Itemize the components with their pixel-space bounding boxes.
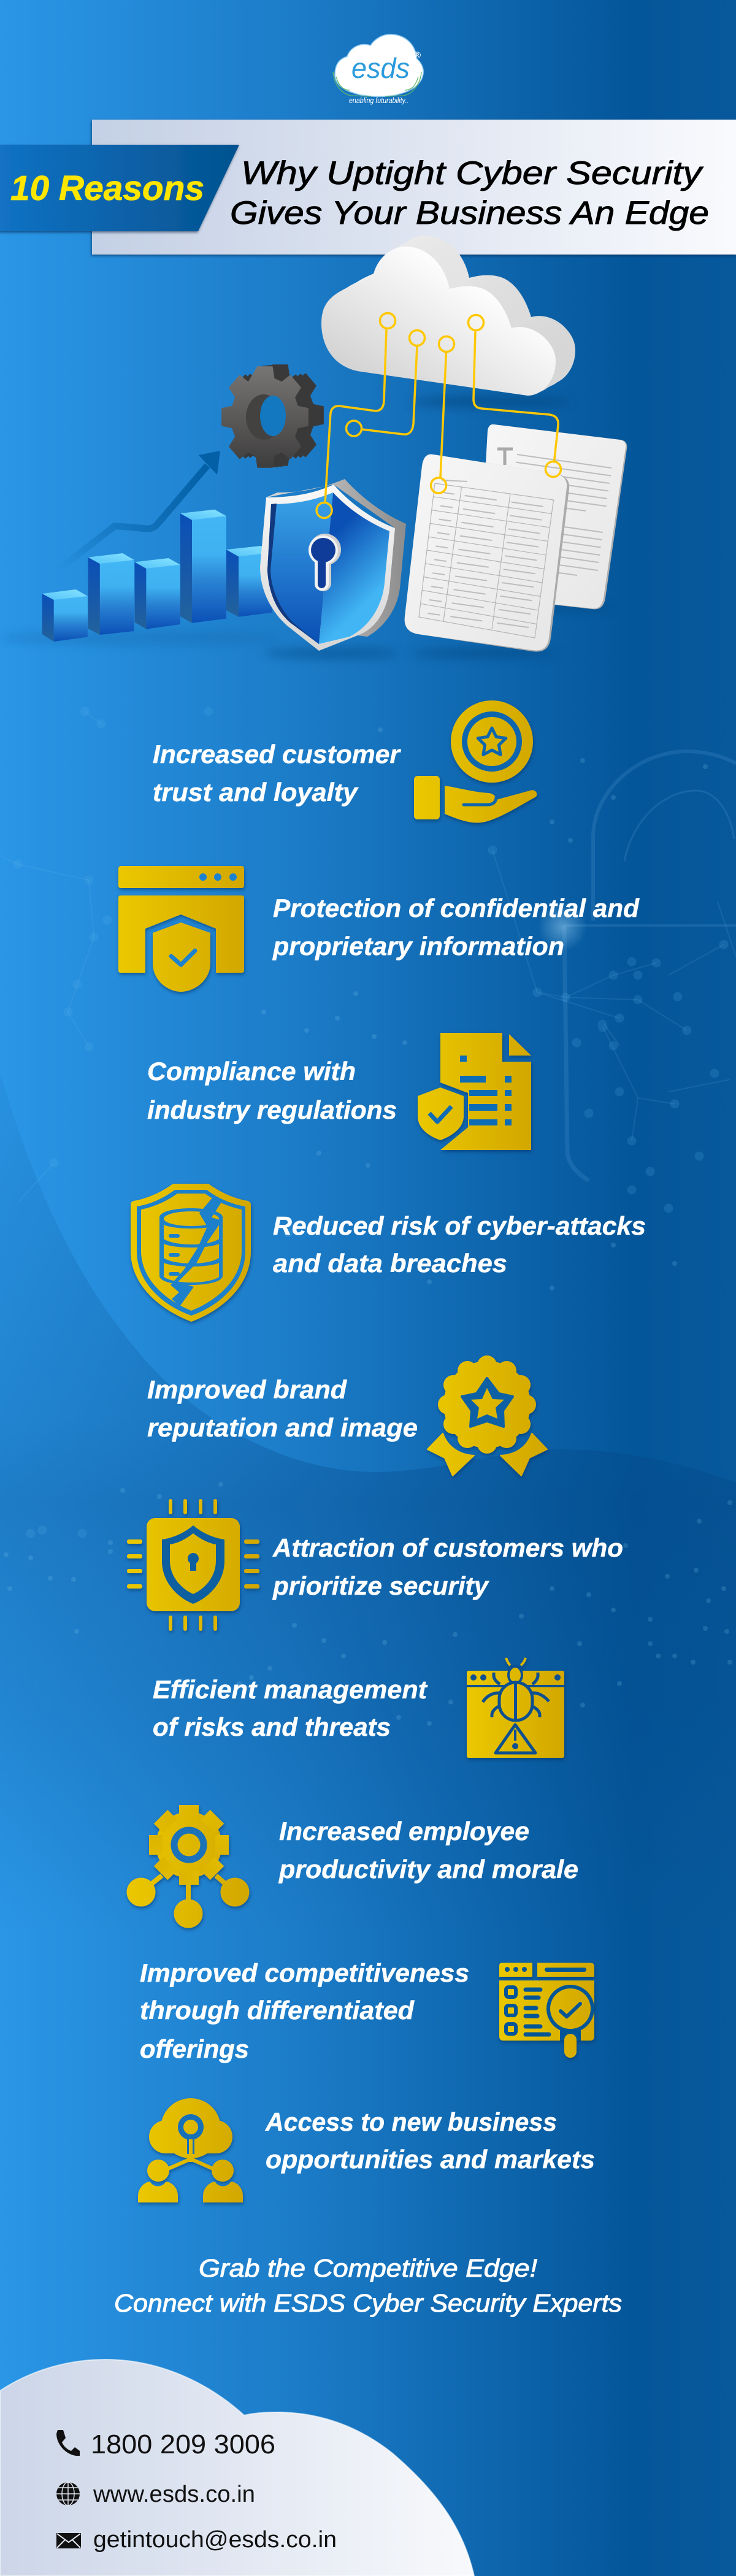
icon: globe xyxy=(56,2482,80,2505)
icon: compliance document with shield xyxy=(418,1033,531,1150)
reason 3 text: industry regulations xyxy=(147,1095,397,1124)
hero illustration xyxy=(0,236,627,659)
banner white panel xyxy=(92,120,736,255)
reason 10 xyxy=(139,2098,595,2202)
reason 10 text xyxy=(265,2107,595,2174)
reason 9 text: Improved competitiveness xyxy=(140,1958,469,1987)
footer cloud shape xyxy=(0,2359,474,2576)
phone number: 1800 209 3006 xyxy=(91,2429,275,2459)
reason 6 text: Attraction of customers who xyxy=(272,1533,623,1562)
icon: phone xyxy=(56,2430,80,2456)
back document xyxy=(478,424,627,612)
logo cloud xyxy=(335,34,423,96)
growth arrow xyxy=(57,451,220,571)
background dark wave xyxy=(0,1073,736,1932)
reason 7 text xyxy=(153,1675,428,1741)
cloud xyxy=(321,236,575,408)
reason 2 text xyxy=(272,894,640,960)
icon: browser window with shield xyxy=(118,866,244,992)
reason 5 xyxy=(147,1355,547,1476)
title text xyxy=(230,155,709,231)
reason 8 text: productivity and morale xyxy=(278,1855,578,1884)
background padlock outline xyxy=(564,751,736,1181)
reason 4 text: Reduced risk of cyber-attacks xyxy=(273,1211,646,1240)
logo registered mark: ® xyxy=(414,50,421,61)
icon: award badge with star xyxy=(427,1355,547,1476)
gear xyxy=(221,364,324,468)
table text lines xyxy=(427,480,543,627)
title banner xyxy=(0,120,736,255)
reason 1 text: Increased customer xyxy=(153,740,402,769)
footer cloud panel xyxy=(0,2359,474,2576)
logo wordmark: esds xyxy=(351,52,410,84)
yellow circuit lines xyxy=(316,313,561,518)
reason 9 text xyxy=(140,1958,469,2063)
reason 10 text: Access to new business xyxy=(265,2107,557,2136)
reason 3 xyxy=(147,1033,531,1150)
reason 9 text: through differentiated xyxy=(140,1996,415,2025)
icon: mail xyxy=(56,2533,81,2548)
front document with table xyxy=(405,454,569,658)
reason 5 text: Improved brand xyxy=(147,1375,347,1404)
reason 8 xyxy=(126,1805,578,1928)
call to action text: Connect with ESDS Cyber Security Experts xyxy=(114,2289,622,2317)
reason 1 text: trust and loyalty xyxy=(153,778,359,807)
reason 9 xyxy=(140,1958,594,2063)
logo tagline: enabling futurability.. xyxy=(349,96,408,105)
table grid xyxy=(419,483,553,638)
title text: Why Uptight Cyber Security xyxy=(241,155,704,191)
icon: cloud connecting people xyxy=(139,2098,242,2202)
reason 6 xyxy=(127,1499,623,1631)
reason 2 text: proprietary information xyxy=(272,932,564,960)
logo xyxy=(333,34,423,105)
reason 3 text xyxy=(147,1057,397,1124)
background network dots xyxy=(18,711,724,1533)
email: getintouch@esds.co.in xyxy=(93,2527,337,2553)
reason 4 xyxy=(131,1184,646,1322)
call to action text: Grab the Competitive Edge! xyxy=(199,2254,537,2282)
title text: Gives Your Business An Edge xyxy=(230,195,709,231)
ribbon text: 10 Reasons: 10 Reasons xyxy=(10,169,204,208)
reason 2 xyxy=(118,866,640,992)
background network lines xyxy=(0,711,736,1202)
logo hands xyxy=(333,72,421,96)
reason 7 text: Efficient management xyxy=(153,1675,428,1704)
background star particles xyxy=(6,730,730,1723)
banner blue ribbon xyxy=(0,145,239,231)
reason 10 text: opportunities and markets xyxy=(266,2145,595,2174)
reason 9 text: offerings xyxy=(140,2034,249,2063)
reason 5 text: reputation and image xyxy=(147,1413,418,1442)
icon: chip with shield xyxy=(127,1499,259,1631)
reason 6 text xyxy=(272,1533,623,1600)
call to action text xyxy=(114,2254,622,2317)
reason 7 text: of risks and threats xyxy=(153,1712,391,1741)
icon: gear with connected nodes xyxy=(126,1805,249,1928)
icon: shield with cracked database xyxy=(131,1184,251,1322)
icon: checklist with magnifier xyxy=(499,1963,594,2058)
background flare xyxy=(538,902,587,951)
reason 2 text: Protection of confidential and xyxy=(273,894,640,922)
reason 8 text: Increased employee xyxy=(279,1817,529,1846)
reason 7 xyxy=(153,1658,564,1758)
icon: browser with bug and warning xyxy=(467,1658,564,1758)
reason 3 text: Compliance with xyxy=(147,1057,356,1086)
reason 4 text xyxy=(273,1211,646,1278)
reason 1 xyxy=(153,700,537,823)
website: www.esds.co.in xyxy=(93,2482,255,2507)
reason 5 text xyxy=(147,1375,418,1442)
icon: hand holding star coin xyxy=(414,700,537,823)
reason 1 text xyxy=(153,740,402,807)
keyhole xyxy=(309,534,341,591)
reason 4 text: and data breaches xyxy=(273,1249,507,1278)
reason 8 text xyxy=(278,1817,578,1884)
reason 6 text: prioritize security xyxy=(272,1571,490,1600)
bar chart xyxy=(0,510,282,645)
shield with keyhole xyxy=(260,479,406,659)
